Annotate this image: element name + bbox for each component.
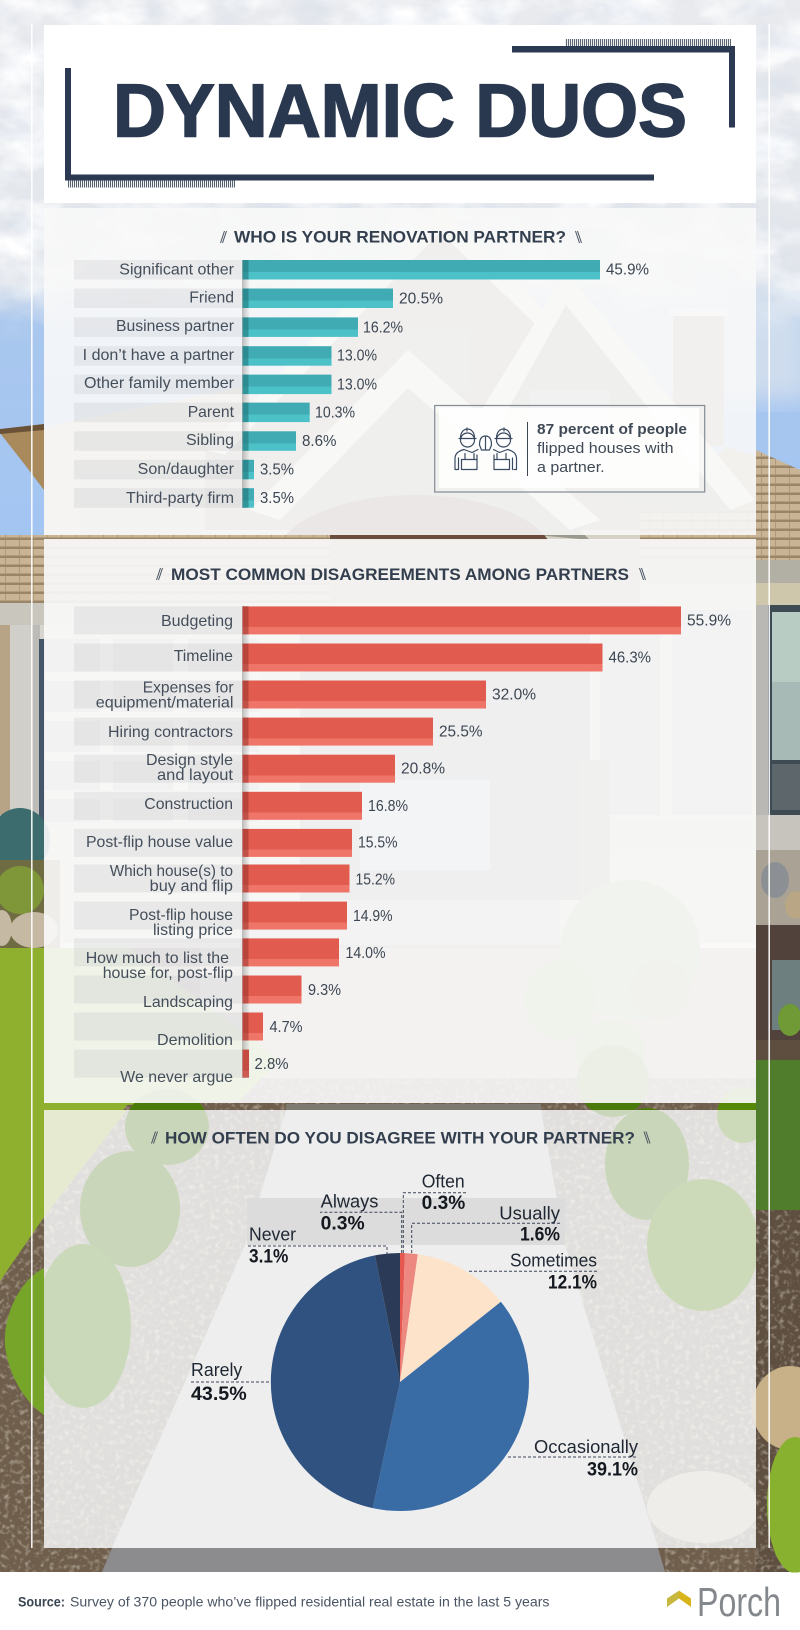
row: budgeting 55.9%: Budgeting (161, 613, 233, 630)
row: expenses 32.0%: equipment/material (96, 694, 233, 711)
logo: Porch (667, 1579, 781, 1625)
heading: HOW OFTEN DO YOU DISAGREE WITH YOUR PARTNER? (165, 1128, 635, 1148)
row: business partner 16.2%: Business partner (116, 318, 235, 335)
row: son/daughter 3.5% (138, 460, 294, 479)
steps (240, 900, 560, 1090)
label: rarely: 43.5% (191, 1384, 247, 1405)
row: construction 16.8% (144, 792, 408, 820)
label bands and axis shadow (74, 606, 250, 1078)
row: third-party firm 3.5%: 3.5% (260, 490, 294, 507)
label: always: 0.3% (321, 1213, 365, 1234)
row: post-flip house value 15.5%: Post-flip house value (86, 834, 233, 851)
source note: Source: (18, 1593, 65, 1609)
row: significant other 45.9%: Significant other (119, 262, 235, 278)
label: usually: 1.6% (520, 1225, 560, 1246)
row: budgeting 55.9% (161, 606, 731, 634)
row: listing price 14.9%: 14.9% (353, 908, 392, 925)
label: occasionally: Occasionally (534, 1437, 638, 1457)
panel: title (44, 25, 756, 203)
panel: most common disagreements (44, 539, 756, 1103)
row: how much to list 14.0%: 14.0% (346, 945, 386, 962)
row: no partner 13.0% (83, 346, 377, 366)
row: which houses 15.2%: buy and flip (150, 878, 233, 895)
source note: Survey of 370 people who’ve flipped residential real estate in the last 5 years (70, 1593, 550, 1609)
row: other family member 13.0%: 13.0% (337, 376, 377, 394)
footer (0, 1572, 800, 1630)
row: construction 16.8%: 16.8% (368, 798, 408, 815)
right edge strip (756, 605, 768, 815)
callout: 87 percent (435, 406, 705, 492)
mulch seen through the third panel (44, 1110, 756, 1548)
row: parent 10.3%: Parent (188, 404, 235, 421)
panel: how often do you disagree (44, 1110, 756, 1548)
row: landscaping 9.3%: Landscaping (143, 994, 233, 1011)
row: friend 20.5%: Friend (189, 290, 234, 306)
row: listing price 14.9%: Post-flip house (129, 907, 233, 924)
row: how much to list 14.0% (86, 938, 386, 982)
label: never: Never (249, 1225, 296, 1245)
row: demolition 4.7% (157, 1012, 302, 1049)
label: always (320, 1191, 402, 1253)
row: design style 20.8%: 20.8% (401, 760, 445, 778)
row: post-flip house value 15.5%: 15.5% (358, 834, 398, 852)
row: business partner 16.2%: 16.2% (363, 320, 403, 336)
label: often (403, 1171, 466, 1253)
row: expenses 32.0% (96, 679, 536, 711)
row: significant other 45.9%: 45.9% (606, 262, 649, 278)
row: friend 20.5% (189, 288, 443, 308)
row: demolition 4.7%: 4.7% (270, 1019, 302, 1036)
row: no partner 13.0%: I don’t have a partner (83, 347, 235, 364)
label: always: Always (321, 1191, 378, 1211)
panel: who is your renovation partner (44, 208, 756, 535)
door and porch (300, 610, 590, 900)
row: expenses 32.0%: 32.0% (492, 686, 536, 704)
row: demolition 4.7%: Demolition (157, 1032, 233, 1049)
row: sibling 8.6% (186, 431, 336, 451)
heading: MOST COMMON DISAGREEMENTS AMONG PARTNERS (171, 565, 629, 584)
row: sibling 8.6%: 8.6% (302, 433, 336, 450)
row: which houses 15.2% (110, 863, 395, 895)
row: design style 20.8%: and layout (157, 767, 234, 784)
row: post-flip house value 15.5% (86, 829, 398, 857)
pie chart (271, 1253, 529, 1511)
bushes (80, 1151, 180, 1267)
row: timeline 46.3% (174, 644, 651, 672)
label: usually (412, 1203, 561, 1253)
row: construction 16.8%: Construction (144, 796, 233, 813)
label: rarely (191, 1360, 270, 1405)
bar chart: renovation partner (83, 260, 649, 508)
row: we never argue 2.8%: We never argue (120, 1069, 233, 1086)
shingled roofline (0, 535, 330, 605)
row: design style 20.8% (146, 752, 445, 784)
row: how much to list 14.0%: How much to list the (86, 950, 229, 967)
row: landscaping 9.3%: 9.3% (308, 982, 341, 999)
row: timeline 46.3%: Timeline (174, 648, 233, 665)
bar chart: disagreements (86, 606, 731, 1086)
title frame bracket and hatching (65, 39, 735, 188)
row: other family member 13.0% (84, 375, 377, 394)
callout text: a partner. (537, 459, 605, 476)
label: sometimes: Sometimes (510, 1250, 597, 1270)
row: friend 20.5%: 20.5% (399, 290, 443, 308)
row: son/daughter 3.5%: 3.5% (260, 462, 294, 478)
row: no partner 13.0%: 13.0% (337, 348, 377, 364)
walkway (286, 1104, 541, 1110)
row: how much to list 14.0%: house for, post-flip (103, 965, 233, 982)
label: usually: Usually (499, 1203, 560, 1223)
row: hiring contractors 25.5% (108, 718, 482, 746)
label: often: Often (422, 1171, 465, 1191)
house body (44, 470, 756, 590)
row: significant other 45.9% (119, 260, 649, 280)
heading: WHO IS YOUR RENOVATION PARTNER? (234, 227, 566, 246)
callout text (537, 421, 687, 476)
callout text: flipped houses with (537, 440, 674, 457)
garden beds (0, 948, 756, 1572)
row: listing price 14.9%: listing price (153, 922, 233, 939)
row: we never argue 2.8% (120, 1050, 288, 1086)
left eave (0, 425, 44, 490)
title: DYNAMIC DUOS (113, 68, 687, 152)
label: never: 3.1% (249, 1247, 288, 1268)
callout text: 87 percent of people (537, 421, 687, 438)
label: never (248, 1225, 387, 1268)
left shrubs (0, 808, 50, 872)
icon: two workers high-fiving (455, 428, 516, 470)
row: we never argue 2.8%: 2.8% (254, 1056, 288, 1073)
label: sometimes: 12.1% (548, 1273, 597, 1294)
row: landscaping 9.3% (143, 976, 341, 1011)
row: expenses 32.0%: Expenses for (143, 679, 234, 696)
row: hiring contractors 25.5%: Hiring contractors (108, 724, 233, 741)
row: sibling 8.6%: Sibling (186, 432, 234, 449)
row: which houses 15.2%: 15.2% (356, 872, 395, 888)
row: which houses 15.2%: Which house(s) to (110, 863, 233, 880)
row: third-party firm 3.5% (126, 488, 294, 508)
label bands and axis shadow (74, 260, 250, 508)
row: son/daughter 3.5%: Son/daughter (138, 461, 235, 478)
row: design style 20.8%: Design style (146, 752, 233, 769)
label: sometimes (469, 1250, 597, 1294)
row: parent 10.3%: 10.3% (315, 404, 355, 422)
label: occasionally: 39.1% (587, 1460, 638, 1480)
row: parent 10.3% (188, 403, 355, 422)
label: rarely: Rarely (191, 1360, 242, 1380)
row: business partner 16.2% (116, 317, 403, 337)
row: timeline 46.3%: 46.3% (608, 650, 651, 666)
row: third-party firm 3.5%: Third-party firm (126, 490, 234, 507)
row: budgeting 55.9%: 55.9% (687, 612, 731, 630)
row: listing price 14.9% (129, 902, 392, 939)
wall (0, 603, 800, 943)
label: occasionally (508, 1437, 638, 1480)
row: other family member 13.0%: Other family member (84, 375, 235, 392)
label: often: 0.3% (422, 1193, 465, 1214)
row: hiring contractors 25.5%: 25.5% (439, 724, 482, 740)
